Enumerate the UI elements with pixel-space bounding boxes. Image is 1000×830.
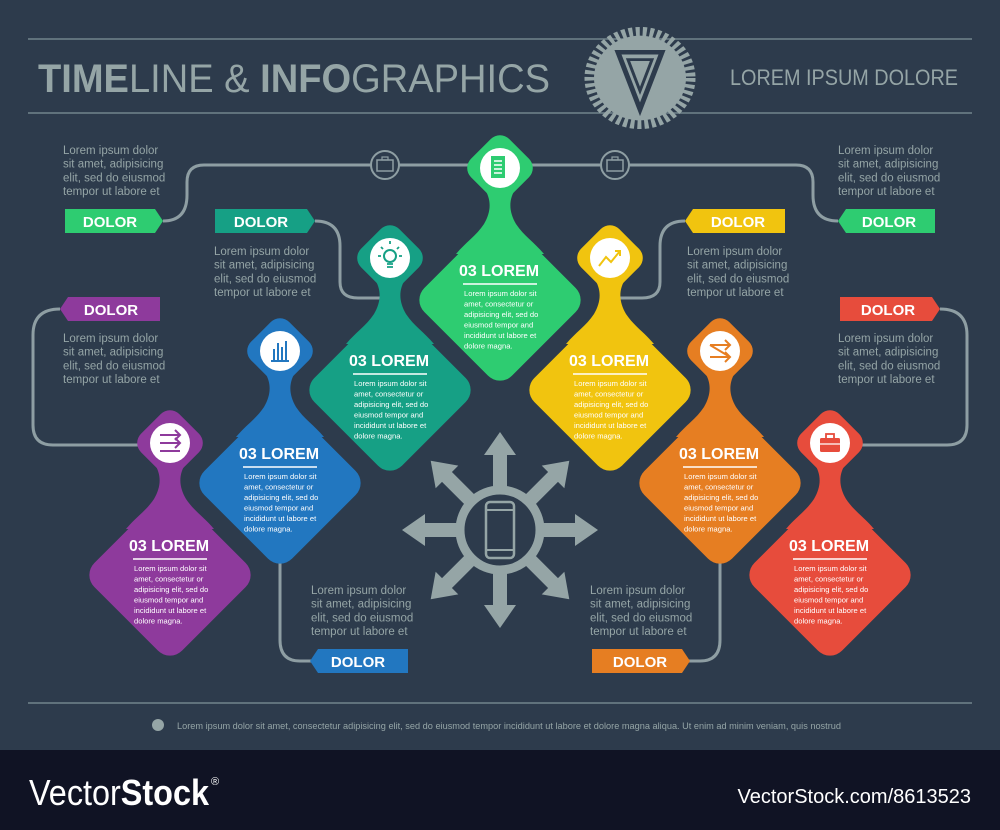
text: yellow: sit amet, adipisicing: [687, 260, 787, 272]
compass: phone with arrows: [402, 432, 598, 628]
text: top left: sit amet, adipisicing: [63, 159, 163, 171]
side text blocks: [63, 145, 940, 638]
text: top right: Lorem ipsum dolor: [838, 145, 933, 157]
text: red: tempor ut labore et: [838, 374, 935, 386]
tab: yellow: [685, 209, 785, 233]
text: top left: Lorem ipsum dolor: [63, 145, 158, 157]
text: yellow: tempor ut labore et: [687, 287, 784, 299]
text: orange: elit, sed do eiusmod: [590, 612, 692, 624]
text: red: sit amet, adipisicing: [838, 347, 938, 359]
pod: green: [412, 130, 588, 388]
connectors: [33, 165, 967, 661]
text: top right: tempor ut labore et: [838, 186, 935, 198]
pod: orange: [632, 313, 808, 571]
tab: purple: DOLOR: [84, 302, 138, 319]
tab: green left: [65, 209, 163, 233]
text: purple: elit, sed do eiusmod: [63, 360, 165, 372]
text: teal: tempor ut labore et: [214, 287, 311, 299]
subtitle: LOREM IPSUM DOLORE: [730, 65, 958, 90]
text: yellow: elit, sed do eiusmod: [687, 273, 789, 285]
text: orange: tempor ut labore et: [590, 626, 687, 638]
text: teal: elit, sed do eiusmod: [214, 273, 316, 285]
pod: teal: 03 LOREM: [349, 353, 429, 370]
tab: teal: [215, 209, 315, 233]
pod: purple: 03 LOREM: [129, 538, 209, 555]
text: blue: sit amet, adipisicing: [311, 599, 411, 611]
text: top left: tempor ut labore et: [63, 186, 160, 198]
pod: orange: 03 LOREM: [679, 446, 759, 463]
tab: blue: [310, 649, 408, 673]
pod: blue: 03 LOREM: [239, 446, 319, 463]
tab: yellow: DOLOR: [711, 214, 765, 231]
text: top left: elit, sed do eiusmod: [63, 172, 165, 184]
text: blue: Lorem ipsum dolor: [311, 585, 406, 597]
text: red: Lorem ipsum dolor: [838, 333, 933, 345]
text: purple: Lorem ipsum dolor: [63, 333, 158, 345]
tab: red: [840, 297, 940, 321]
text: red: elit, sed do eiusmod: [838, 360, 940, 372]
text: teal: Lorem ipsum dolor: [214, 246, 309, 258]
icon: briefcase left: [371, 151, 399, 179]
tab: green right: DOLOR: [862, 214, 916, 231]
text: orange: sit amet, adipisicing: [590, 599, 690, 611]
text: orange: Lorem ipsum dolor: [590, 585, 685, 597]
tab: orange: [592, 649, 690, 673]
tab: purple: [60, 297, 160, 321]
text: purple: sit amet, adipisicing: [63, 347, 163, 359]
tab: green left: DOLOR: [83, 214, 137, 231]
tab: orange: DOLOR: [613, 654, 667, 671]
text: yellow: Lorem ipsum dolor: [687, 246, 782, 258]
pod: yellow: 03 LOREM: [569, 353, 649, 370]
footer band: ®: [211, 776, 219, 788]
footer band: VectorStock: [29, 772, 210, 813]
text: top right: elit, sed do eiusmod: [838, 172, 940, 184]
icon: briefcase right: [601, 151, 629, 179]
pod: purple: [82, 405, 258, 663]
text: blue: elit, sed do eiusmod: [311, 612, 413, 624]
tab: blue: DOLOR: [331, 654, 385, 671]
text: top right: sit amet, adipisicing: [838, 159, 938, 171]
pod: yellow: [522, 220, 698, 478]
tab: red: DOLOR: [861, 302, 915, 319]
pod: green: 03 LOREM: [459, 263, 539, 280]
footer band: VectorStock.com/8613523: [738, 786, 971, 808]
text: purple: tempor ut labore et: [63, 374, 160, 386]
text: teal: sit amet, adipisicing: [214, 260, 314, 272]
tab: teal: DOLOR: [234, 214, 288, 231]
text: blue: tempor ut labore et: [311, 626, 408, 638]
pod: teal: [302, 220, 478, 478]
tab: green right: [838, 209, 935, 233]
pod: red: [742, 405, 918, 663]
tabs: [60, 209, 940, 673]
footnote: Lorem ipsum dolor sit amet, consectetur adipisicing elit, sed do eiusmod tempor incididunt ut labore et dolore magna aliqua. Ut enim ad minim veniam, quis nostrud: [177, 721, 841, 732]
footer band: [0, 750, 1000, 830]
emblem: [590, 32, 690, 124]
pod: blue: [192, 313, 368, 571]
title: TIMELINE & INFOGRAPHICS: [38, 57, 550, 101]
pod: red: 03 LOREM: [789, 538, 869, 555]
